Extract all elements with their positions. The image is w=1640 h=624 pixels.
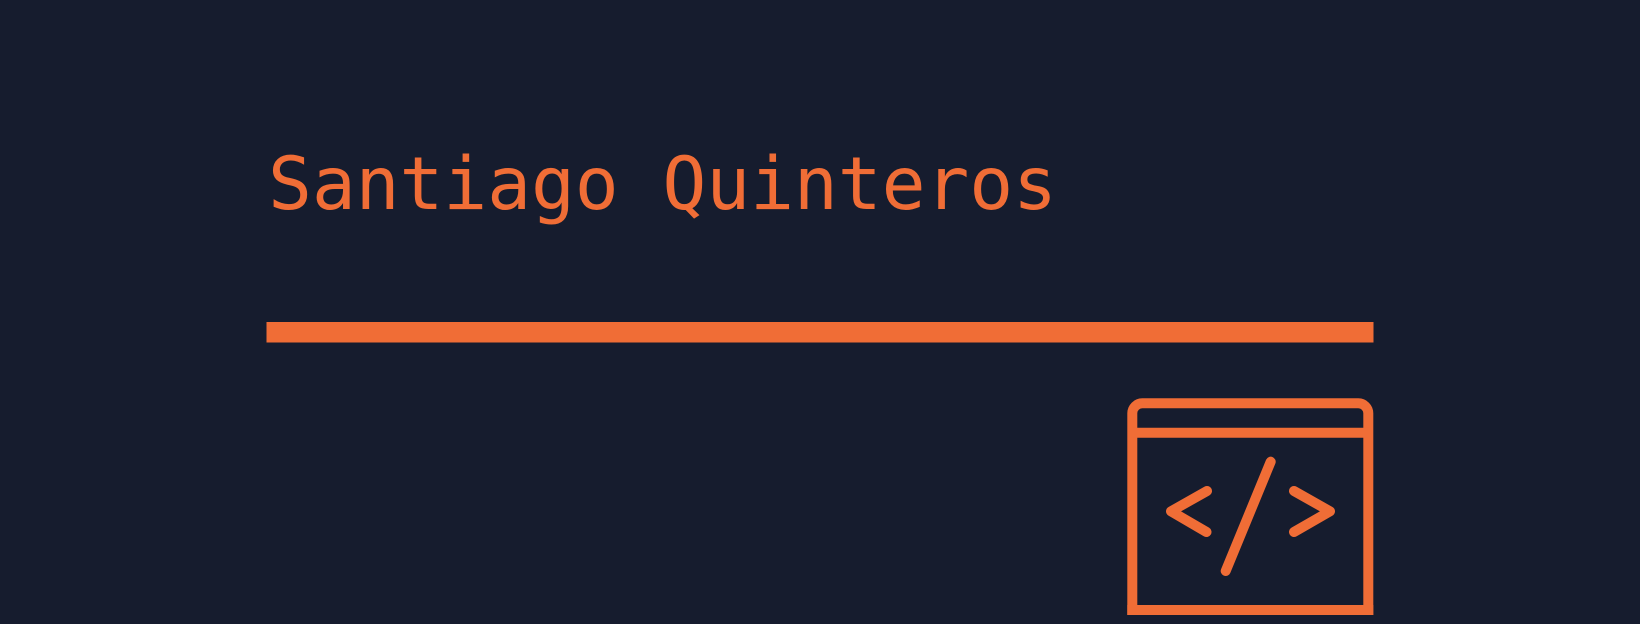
divider bar — [266, 322, 1374, 342]
window bottom edge — [1127, 605, 1373, 615]
title: Santiago Quinteros — [268, 142, 1057, 227]
window frame — [1132, 403, 1368, 615]
icon: code window — [1127, 403, 1373, 615]
code symbol: greater-than chevron — [1294, 491, 1330, 532]
window title bar line — [1132, 428, 1368, 438]
code symbol: less-than chevron — [1171, 491, 1207, 532]
code symbol: slash — [1226, 462, 1271, 571]
